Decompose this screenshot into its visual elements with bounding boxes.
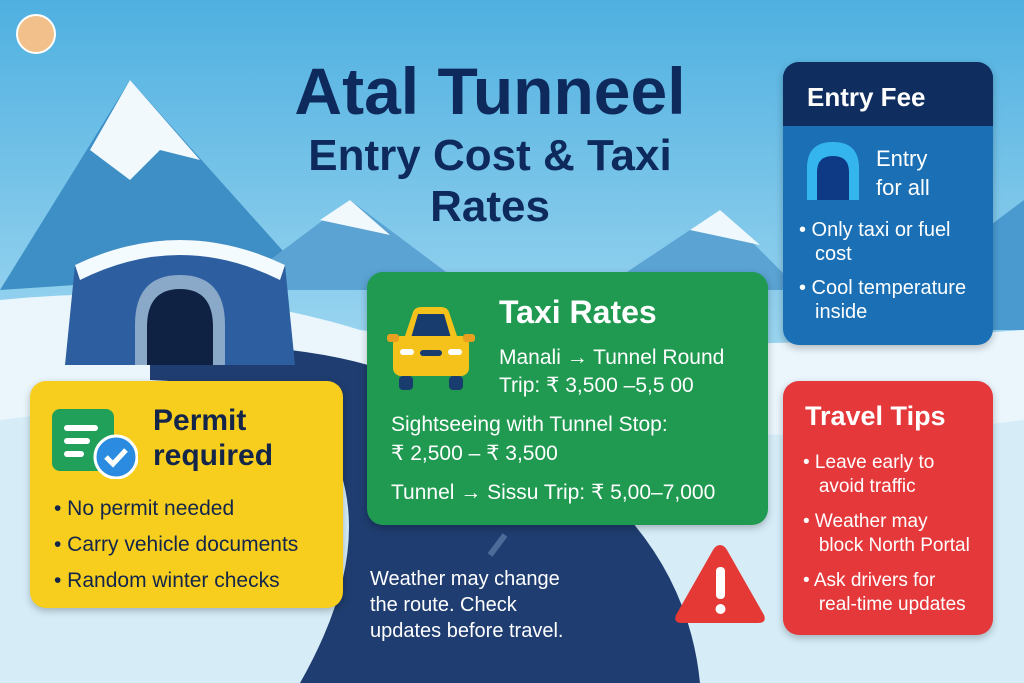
heading: taxi rates: Taxi Rates (499, 294, 657, 330)
list: tips: • Leave early to (803, 452, 934, 473)
list: entry notes: • Only taxi or fuel cost (799, 219, 951, 265)
icon: tunnel portal (65, 240, 295, 365)
text: sightseeing: Sightseeing with Tunnel Stop: (391, 413, 668, 436)
text: manali round trip: Manali → Tunnel Round (499, 346, 724, 369)
heading: permit required: Permit (153, 404, 246, 437)
title: Entry Cost & Taxi (308, 131, 672, 180)
text: sightseeing: ₹ 2,500 – ₹ 3,500 (391, 442, 558, 465)
text: sightseeing (391, 413, 668, 465)
heading: entry fee (783, 62, 993, 126)
road (150, 344, 700, 683)
list: permit notes: • Random winter checks (54, 569, 280, 592)
list: tips: avoid traffic (819, 476, 916, 497)
text: weather note: the route. Check (370, 594, 517, 616)
text: sissu trip: Tunnel → Sissu Trip: ₹ 5,00–7,000 (391, 481, 715, 504)
icon: tunnel arch (807, 142, 859, 200)
logo (16, 14, 56, 54)
text: weather note: Weather may change (370, 568, 560, 590)
list: permit notes: • No permit needed (54, 497, 234, 520)
heading: entry fee: Entry Fee (807, 82, 926, 112)
list: permit notes (54, 497, 298, 592)
list: tips: • Weather may (803, 511, 928, 532)
text: entry for all: for all (876, 175, 930, 200)
title: Rates (430, 182, 550, 231)
heading: permit required (153, 404, 273, 472)
panel: entry fee (783, 62, 993, 345)
panel: permit (30, 381, 343, 608)
text: weather note: updates before travel. (370, 620, 563, 642)
text: manali round trip (499, 346, 724, 397)
panel: travel tips (783, 381, 993, 635)
icon: taxi (387, 307, 475, 390)
list: tips: block North Portal (819, 535, 970, 556)
list: tips (803, 452, 970, 615)
list: tips: real-time updates (819, 594, 966, 615)
list: entry notes: • Cool temperature inside (799, 277, 966, 323)
text: manali round trip: Trip: ₹ 3,500 –5,5 00 (499, 374, 694, 397)
icon: warning triangle (675, 545, 765, 623)
title (294, 54, 686, 231)
list: entry notes (799, 219, 966, 323)
text: entry for all (876, 146, 930, 200)
title: Atal Tunneel (294, 54, 686, 128)
heading: travel tips: Travel Tips (805, 401, 946, 431)
list: tips: • Ask drivers for (803, 570, 935, 591)
icon: document check (52, 409, 138, 479)
text: entry for all: Entry (876, 146, 927, 171)
heading: permit required: required (153, 439, 273, 472)
panel: taxi rates (367, 272, 768, 525)
text: weather note (370, 568, 563, 642)
list: permit notes: • Carry vehicle documents (54, 533, 298, 556)
